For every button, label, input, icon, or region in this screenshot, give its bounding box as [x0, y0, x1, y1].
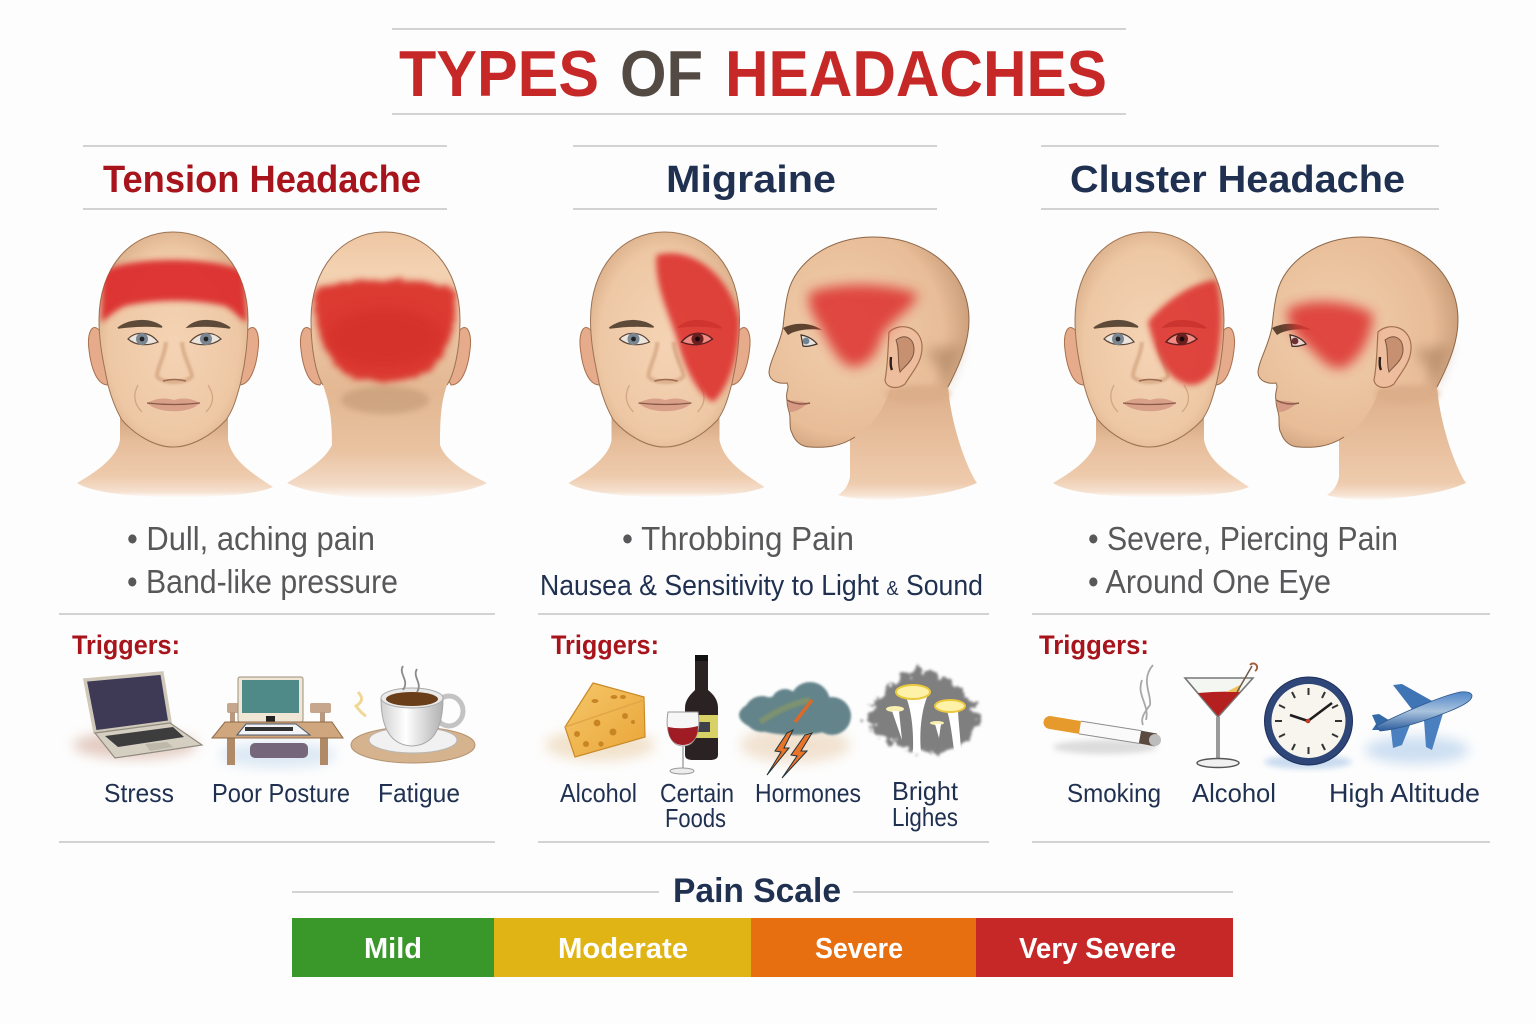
- scale segment: very severe: Very Severe: [1019, 933, 1176, 965]
- symptoms: [540, 520, 983, 602]
- symptoms: • Throbbing Pain: [622, 520, 854, 557]
- trigger labels: Hormones: [755, 778, 861, 808]
- trigger labels: Alcohol: [560, 778, 637, 808]
- title: [392, 29, 1126, 114]
- symptoms: [127, 520, 398, 600]
- icon: storm cloud: [739, 682, 851, 778]
- heading: migraine: Migraine: [666, 159, 836, 201]
- trigger labels: Bright: [892, 776, 959, 806]
- pain scale heading: Pain Scale: [673, 872, 841, 910]
- triggers heading: Triggers:: [1039, 630, 1149, 660]
- icon: cigarette: [1050, 665, 1161, 754]
- icon: airplane: [1365, 684, 1472, 764]
- symptoms: • Around One Eye: [1088, 563, 1331, 600]
- icon: coffee cup: [351, 666, 475, 763]
- title: OF: [620, 37, 703, 110]
- panel: tension headache: [59, 146, 495, 842]
- trigger labels: Foods: [665, 803, 726, 833]
- trigger labels: Stress: [104, 778, 174, 808]
- trigger labels: Certain: [660, 778, 734, 808]
- trigger labels: Lighes: [892, 802, 958, 832]
- trigger labels: [1067, 778, 1480, 808]
- scale segment: very severe: [976, 918, 1233, 977]
- scale segment: moderate: [494, 918, 751, 977]
- trigger labels: Fatigue: [378, 778, 460, 808]
- scale segment: moderate: Moderate: [558, 933, 688, 965]
- symptoms: • Band-like pressure: [127, 563, 398, 600]
- symptoms: • Severe, Piercing Pain: [1088, 520, 1398, 557]
- symptoms: [1088, 520, 1398, 600]
- icon: wine bottle and glass: [667, 655, 718, 774]
- trigger labels: Smoking: [1067, 778, 1161, 808]
- illustration: side head with temple pain: [769, 237, 977, 500]
- illustration: back head with band: [287, 232, 487, 498]
- symptoms: Nausea & Sensitivity to Light & Sound: [540, 570, 983, 602]
- illustration: front head with forehead band: [77, 232, 273, 497]
- panel: cluster headache: [1032, 146, 1490, 842]
- symptoms: • Dull, aching pain: [127, 520, 375, 557]
- illustration: front head with eye pain: [1053, 232, 1249, 497]
- triggers heading: Triggers:: [551, 630, 659, 660]
- illustration: front head with one-sided pain: [568, 232, 764, 497]
- trigger labels: [560, 776, 959, 833]
- icon: martini glass: [1185, 663, 1257, 768]
- title: HEADACHES: [725, 37, 1107, 110]
- icon: cheese: [545, 683, 655, 761]
- trigger labels: High Altitude: [1329, 778, 1480, 808]
- title: TYPES: [399, 37, 599, 110]
- icon: bright lights: [865, 668, 982, 752]
- illustration: side head with eye pain: [1258, 237, 1466, 500]
- heading: tension headache: Tension Headache: [103, 159, 421, 201]
- scale segment: mild: [292, 918, 494, 977]
- trigger labels: Alcohol: [1192, 778, 1276, 808]
- heading: cluster headache: Cluster Headache: [1070, 159, 1405, 201]
- icon: clock: [1264, 677, 1352, 769]
- pain scale: [292, 872, 1233, 977]
- scale segment: severe: [751, 918, 976, 977]
- triggers heading: Triggers:: [72, 630, 180, 660]
- icon: laptop: [73, 673, 202, 759]
- scale segment: severe: Severe: [815, 933, 903, 965]
- scale segment: mild: Mild: [364, 933, 422, 965]
- icon: desk with computer: [212, 677, 343, 768]
- trigger labels: [104, 778, 460, 808]
- panel: migraine: [538, 146, 989, 842]
- trigger labels: Poor Posture: [212, 778, 350, 808]
